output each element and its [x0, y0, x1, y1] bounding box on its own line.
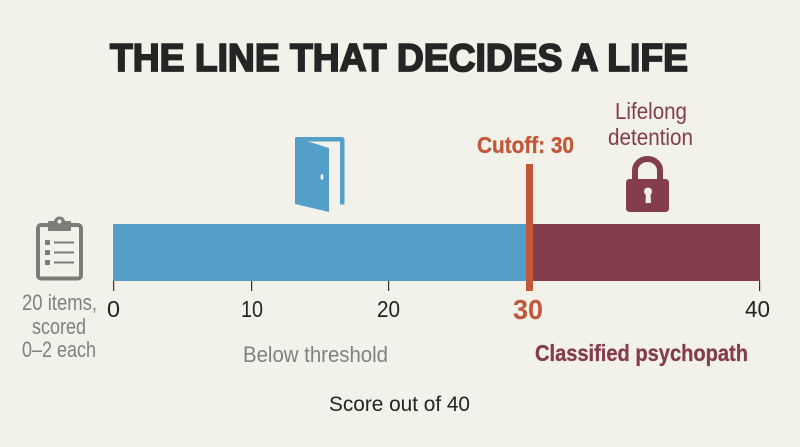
axis labels: 20 [377, 296, 400, 322]
icon: open door [295, 137, 344, 212]
clipboard caption: 20 items, [22, 290, 97, 315]
cutoff axis label: 30 [513, 294, 543, 325]
score bar [113, 224, 760, 281]
callout: lifelong detention: Lifelong [615, 98, 687, 124]
cutoff label: Cutoff: 30 [477, 132, 574, 158]
cutoff line [526, 164, 533, 291]
classified segment [533, 224, 760, 281]
axis labels [107, 296, 770, 322]
callout: lifelong detention [608, 98, 693, 150]
axis labels: 40 [745, 296, 770, 322]
clipboard caption: scored [32, 314, 86, 339]
axis ticks [113, 281, 760, 291]
label: below threshold: Below threshold [243, 342, 388, 367]
callout: lifelong detention: detention [608, 124, 693, 150]
axis labels: 10 [241, 296, 263, 322]
clipboard caption [22, 290, 97, 362]
axis title: Score out of 40 [329, 393, 470, 416]
axis labels: 0 [107, 296, 120, 322]
icon: clipboard [38, 216, 81, 278]
label: classified psychopath: Classified psychopath [535, 340, 748, 366]
below-threshold segment [113, 224, 527, 281]
clipboard caption: 0–2 each [22, 337, 96, 362]
title: THE LINE THAT DECIDES A LIFE [110, 37, 688, 80]
icon: padlock [626, 159, 669, 212]
